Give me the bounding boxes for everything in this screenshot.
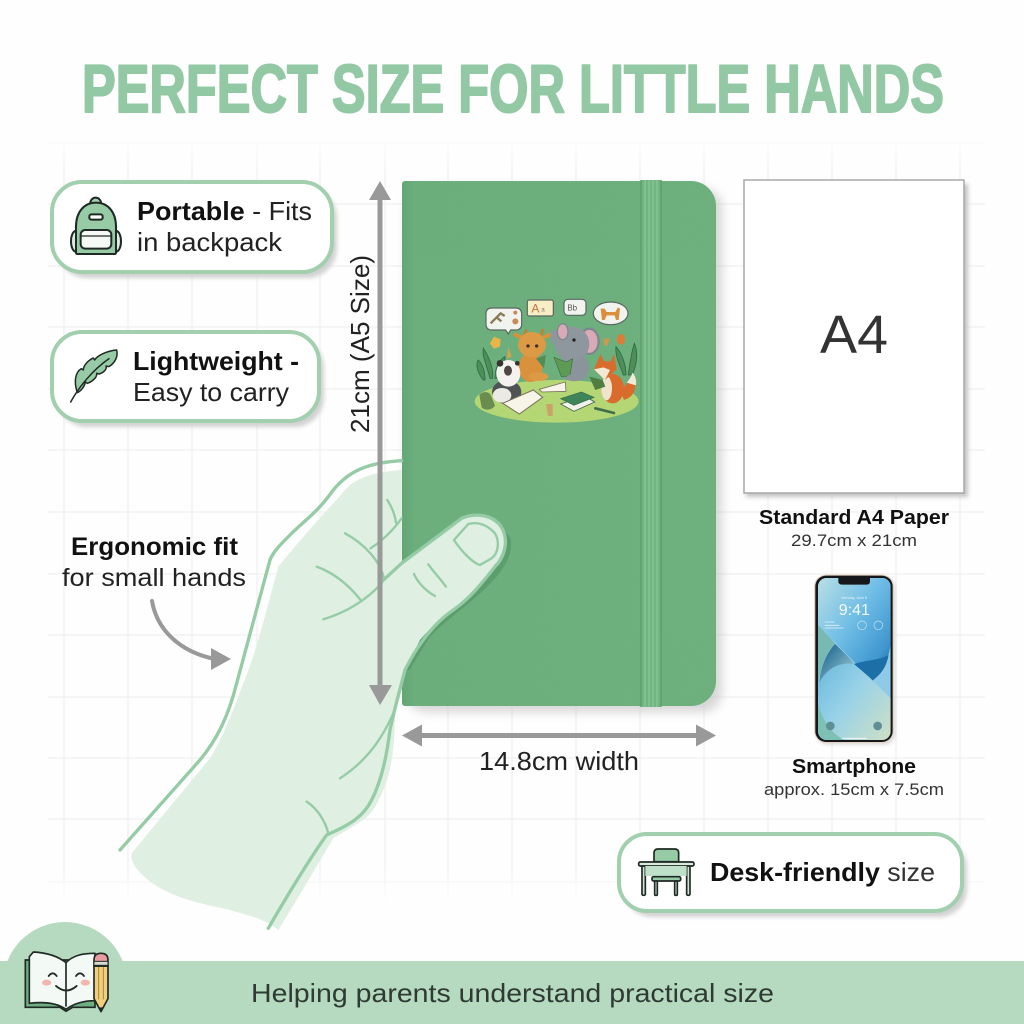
- label: smartphone: [764, 756, 944, 799]
- illustration: animals reading: a: [541, 307, 545, 313]
- phone: 9:41: [839, 602, 870, 619]
- panel: A4 paper: [744, 180, 968, 497]
- icon: desk and chair: [639, 849, 694, 895]
- label: A4 paper: [759, 507, 949, 550]
- illustration: animals reading: Bb: [567, 304, 578, 313]
- green book: [561, 392, 595, 411]
- notebook: [402, 180, 722, 712]
- arrow: height dimension: [369, 181, 392, 705]
- panel: A4 paper: A4: [820, 305, 888, 365]
- label: smartphone: approx. 15cm x 7.5cm: [764, 780, 944, 799]
- text: desk-friendly: Desk-friendly size: [710, 857, 935, 887]
- label: ergonomic fit: Ergonomic fit: [71, 533, 239, 561]
- hand outlines: [120, 461, 505, 928]
- arrow: to hand: [152, 601, 231, 670]
- phone: [814, 575, 895, 745]
- icon: smiling book and pencil: [25, 952, 108, 1012]
- callout: portable: in backpack: [137, 227, 283, 257]
- label: ergonomic fit: [62, 533, 246, 592]
- elephant: [550, 324, 599, 381]
- label: A4 paper: 29.7cm x 21cm: [791, 531, 917, 550]
- fox: [589, 354, 636, 403]
- illustration: animals reading: A: [531, 302, 539, 316]
- hand fill: [131, 470, 505, 930]
- phone: Monday, June 6: [841, 596, 867, 600]
- elastic band: [641, 180, 661, 707]
- icon: feather: [71, 350, 117, 402]
- speech bubbles: [486, 299, 628, 334]
- thumb shadow: [402, 518, 511, 670]
- plants: [477, 343, 637, 380]
- panda: [492, 360, 521, 404]
- callout: lightweight: [52, 332, 324, 427]
- deer: [515, 330, 550, 382]
- footer band: [0, 922, 1024, 1024]
- label: height: 21cm (A5 Size): [345, 255, 375, 433]
- callout: desk-friendly: [619, 834, 967, 917]
- text: lightweight: Lightweight -: [133, 346, 299, 376]
- callout: lightweight: Easy to carry: [133, 377, 289, 407]
- label: A4 paper: Standard A4 Paper: [759, 507, 949, 529]
- text: portable: Portable - Fits: [137, 196, 312, 226]
- label: width: 14.8cm width: [479, 746, 639, 776]
- footer text: Helping parents understand practical size: [251, 978, 774, 1008]
- callout: portable: [52, 182, 337, 278]
- label: smartphone: Smartphone: [792, 756, 916, 778]
- hand illustration: [120, 461, 511, 930]
- arrow: width dimension: [402, 724, 716, 746]
- label: ergonomic fit: for small hands: [62, 564, 246, 592]
- illustration: animals reading: [475, 299, 639, 423]
- icon: backpack: [71, 198, 121, 254]
